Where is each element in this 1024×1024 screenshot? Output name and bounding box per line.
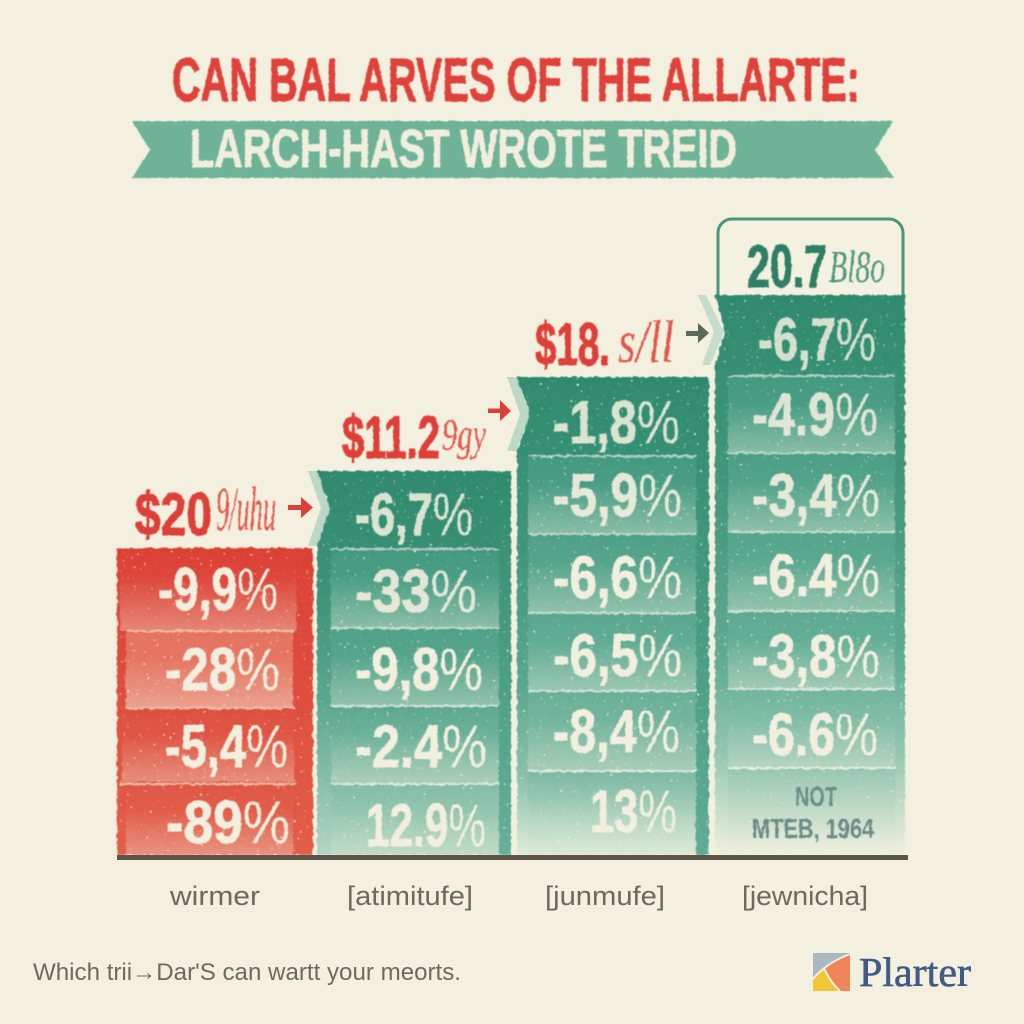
red bar values: -9,9% <box>158 556 278 623</box>
green bar body <box>317 471 511 855</box>
chevron <box>698 295 724 365</box>
column 4: green bar with header box <box>698 219 905 855</box>
green bar values: -6,7% <box>758 306 876 373</box>
red bar values <box>158 556 290 856</box>
column 3: green bar <box>507 377 709 855</box>
arrow <box>686 323 709 343</box>
green bar values: -5,9% <box>553 462 682 529</box>
category labels <box>169 881 868 911</box>
column 1: red bar <box>117 548 313 856</box>
red bar body <box>117 548 313 855</box>
red bar values: -5,4% <box>165 713 288 780</box>
green bar values: -9,8% <box>355 636 483 703</box>
value label: 20.7: 20.7 <box>747 233 827 300</box>
value label: 20.7: Bl8o <box>829 241 885 292</box>
green bar values: -3,4% <box>752 462 880 529</box>
green bar values: -2.4% <box>355 713 487 780</box>
category labels: wirmer <box>169 881 260 911</box>
arrow <box>288 497 313 518</box>
category labels: [junmufe] <box>545 881 665 911</box>
logo <box>813 949 971 995</box>
header box <box>718 219 903 309</box>
footnote in bar <box>752 781 874 844</box>
category labels: [atimitufe] <box>347 881 473 911</box>
red bar values: -89% <box>166 789 290 856</box>
green bar values <box>752 306 880 768</box>
value label: $11.2: 9gy <box>442 409 486 460</box>
green bar values: -6,6% <box>553 544 682 611</box>
green bar values: -1,8% <box>553 389 680 456</box>
green bar values <box>355 481 487 859</box>
ribbon text: LARCH-HAST WROTE TREID <box>190 119 737 179</box>
green bar body <box>715 295 905 855</box>
logo mark <box>813 953 850 991</box>
column 2: green bar <box>308 471 511 859</box>
footnote in bar: MTEB, 1964 <box>752 813 874 844</box>
green bar values: -4.9% <box>752 381 878 448</box>
subtitle ribbon <box>132 119 894 179</box>
footnote in bar: NOT <box>795 781 837 812</box>
green bar values: -3,8% <box>752 623 880 690</box>
value label: $18: $18. <box>535 311 610 378</box>
value label: $20 <box>135 476 276 548</box>
value label: $11.2: $11.2 <box>342 404 440 471</box>
green bar values: -6,5% <box>553 622 682 689</box>
arrow <box>488 400 511 421</box>
green bar values: -6.6% <box>752 701 878 768</box>
value label: $20: $20 <box>135 481 212 548</box>
green bar values: -6,7% <box>355 481 473 548</box>
green bar values: -6.4% <box>752 542 880 609</box>
green bar values: -33% <box>355 558 477 625</box>
value label: $18: s/ll <box>618 309 674 375</box>
green bar body <box>517 377 709 855</box>
red bar values: -28% <box>165 636 280 703</box>
footer note: Which trii→Dar'S can wartt your meorts. <box>33 959 461 986</box>
ribbon shape <box>132 121 894 178</box>
green bar values: 13% <box>590 778 677 845</box>
chevron <box>507 377 530 451</box>
infographic canvas: 9/uhu <box>216 476 276 544</box>
baseline axis <box>117 855 908 860</box>
logo wordmark: Plarter <box>859 949 971 995</box>
green bar values: -8,4% <box>553 698 680 765</box>
chevron <box>308 471 330 546</box>
category labels: [jewnicha] <box>742 881 868 911</box>
green bar values: 12.9% <box>366 792 486 859</box>
green bar values <box>553 389 682 845</box>
